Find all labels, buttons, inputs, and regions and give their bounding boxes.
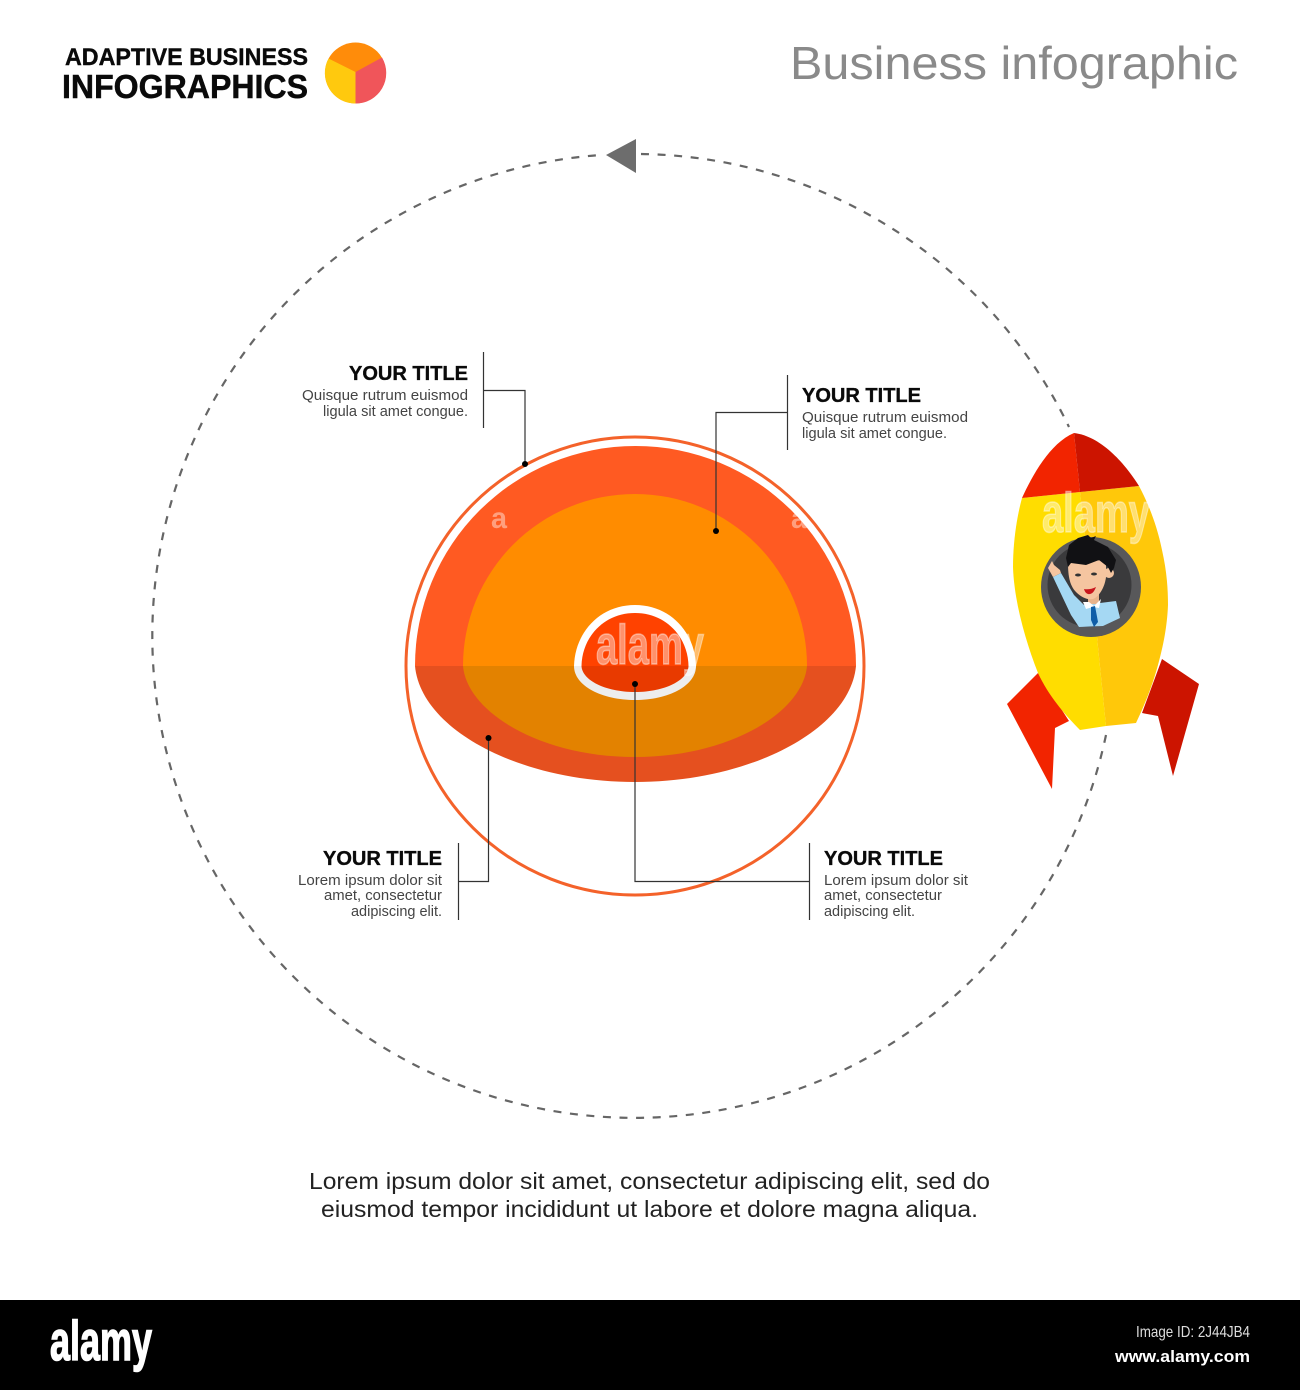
callout: bottom left: adipiscing elit. <box>351 904 442 920</box>
logo heading: INFOGRAPHICS <box>62 68 308 105</box>
callout: bottom left: YOUR TITLE <box>323 848 442 870</box>
core <box>574 605 696 700</box>
callout: top left: YOUR TITLE <box>349 363 468 385</box>
callout: bottom left: Lorem ipsum dolor sit <box>298 873 442 889</box>
footer text <box>309 1168 990 1222</box>
callout: bottom right: Lorem ipsum dolor sit <box>824 873 968 889</box>
dashed orbit circle <box>152 154 1106 1118</box>
callout: top left: Quisque rutrum euismod <box>302 388 468 404</box>
watermarks <box>491 481 1150 676</box>
rocket nose <box>1022 433 1080 498</box>
footer text: eiusmod tempor incididunt ut labore et dolore magna aliqua. <box>321 1196 978 1222</box>
callout: top left: ligula sit amet congue. <box>323 404 468 420</box>
watermarks: a <box>791 502 807 535</box>
rocket <box>1007 433 1199 789</box>
watermarks: alamy <box>596 613 704 676</box>
stock photo bar: alamy <box>50 1309 152 1372</box>
callout: bottom right <box>632 681 968 920</box>
stock photo bar <box>0 1300 1300 1390</box>
callout: top left <box>302 352 528 467</box>
right fin <box>1142 659 1199 776</box>
page title: Business infographic <box>790 37 1238 89</box>
icon: logo pie <box>325 42 386 104</box>
stock photo bar: Image ID: 2J44JB4 <box>1136 1324 1250 1341</box>
callout: top right: ligula sit amet congue. <box>802 426 947 442</box>
left fin <box>1007 673 1069 789</box>
watermarks: alamy <box>1042 481 1150 544</box>
callout: top right <box>713 375 968 534</box>
logo heading: ADAPTIVE BUSINESS <box>65 44 308 71</box>
callout: bottom left <box>298 735 492 920</box>
stock photo bar: www.alamy.com <box>1114 1347 1250 1366</box>
layered dome diagram <box>415 446 856 782</box>
callout: bottom right: amet, consectetur <box>824 888 942 904</box>
callout: bottom right: YOUR TITLE <box>824 848 943 870</box>
footer text: Lorem ipsum dolor sit amet, consectetur adipiscing elit, sed do <box>309 1168 990 1194</box>
outer layer <box>415 446 856 782</box>
rocket body <box>1013 492 1106 730</box>
rocket window <box>1041 537 1141 637</box>
middle layer <box>463 494 807 757</box>
logo heading <box>62 44 308 105</box>
astronaut businessman <box>1048 535 1120 627</box>
outer ring <box>406 437 864 895</box>
callout: bottom right: adipiscing elit. <box>824 904 915 920</box>
callout: top right: YOUR TITLE <box>802 385 921 407</box>
watermarks: a <box>491 502 507 535</box>
arrow: orbit direction <box>606 139 636 173</box>
callout: bottom left: amet, consectetur <box>324 888 442 904</box>
callout: top right: Quisque rutrum euismod <box>802 410 968 426</box>
